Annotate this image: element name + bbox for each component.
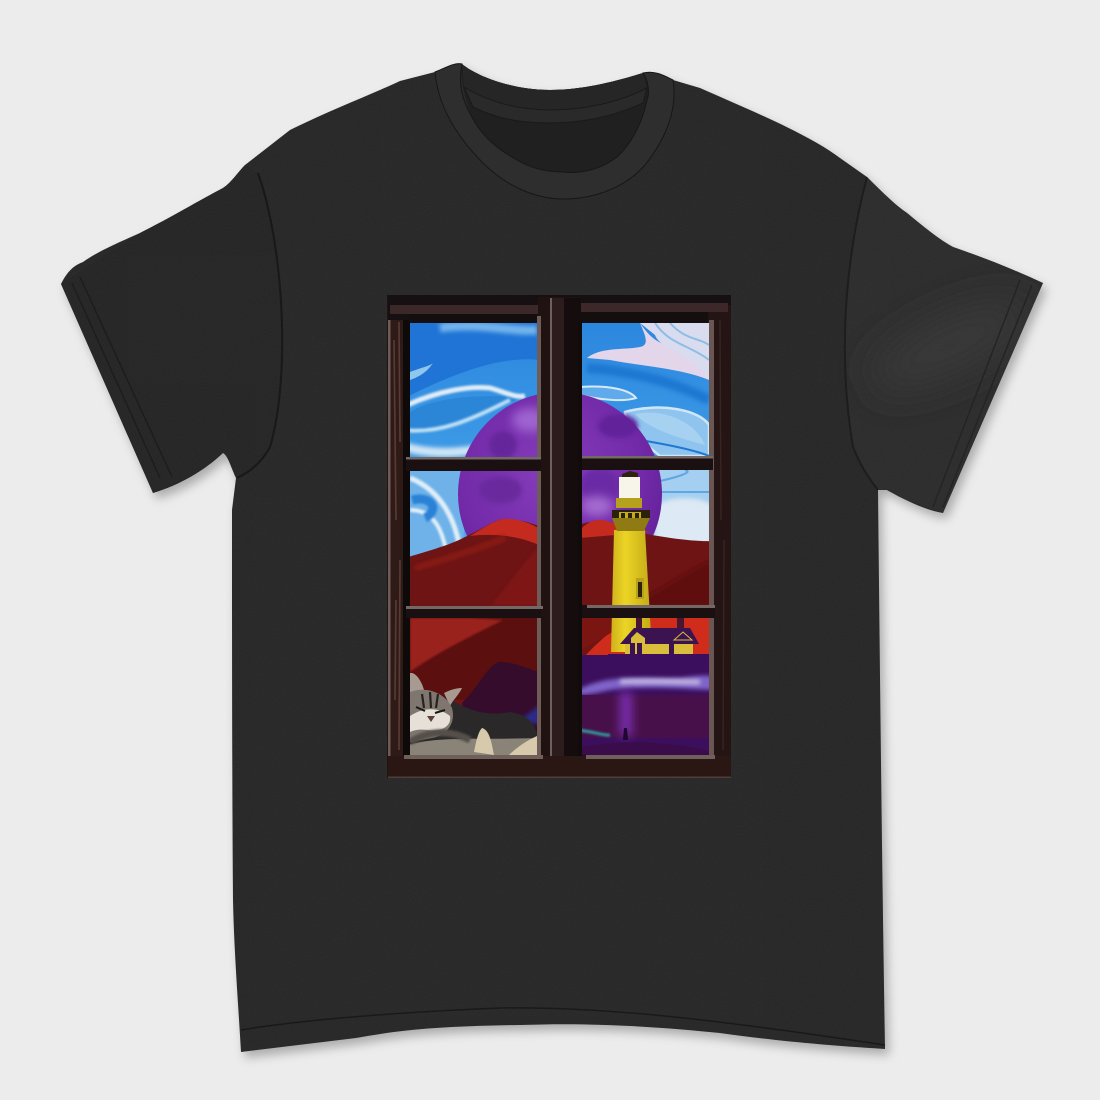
dark hill behind cat (462, 662, 537, 734)
inside of neck (462, 64, 648, 172)
central post (538, 297, 581, 778)
outer frame left (388, 305, 410, 770)
pink swirl (587, 323, 709, 380)
cat ears (410, 673, 462, 706)
right sleeve (867, 177, 1043, 513)
cat head (410, 690, 453, 742)
sleeping cat (408, 673, 540, 758)
back neck tape (464, 87, 647, 123)
back rib (462, 64, 647, 110)
horizontal muntins (406, 456, 715, 618)
sleeve seams (237, 173, 282, 478)
scene seen through the panes (405, 318, 715, 760)
swirling sky (410, 323, 709, 556)
dark backing of the window (387, 295, 731, 778)
fur and cream tufts (410, 738, 532, 755)
front collar rib (435, 64, 674, 199)
purple moon (458, 394, 662, 536)
frame right (709, 305, 731, 776)
collar (435, 64, 674, 199)
lighthouse keeper's house (608, 618, 709, 655)
cat body (410, 698, 537, 744)
bottom rail (388, 756, 731, 778)
window artwork (387, 295, 731, 778)
top rail (388, 295, 731, 320)
lighthouse (611, 471, 652, 652)
lower right sky (653, 470, 709, 536)
hem stitching (241, 1008, 885, 1045)
red mountains (410, 518, 709, 734)
purple foreground with aurora (578, 655, 712, 760)
window frame (388, 295, 731, 778)
left sleeve (61, 165, 245, 493)
lower red slope left (410, 618, 540, 700)
bright red right (586, 618, 709, 655)
